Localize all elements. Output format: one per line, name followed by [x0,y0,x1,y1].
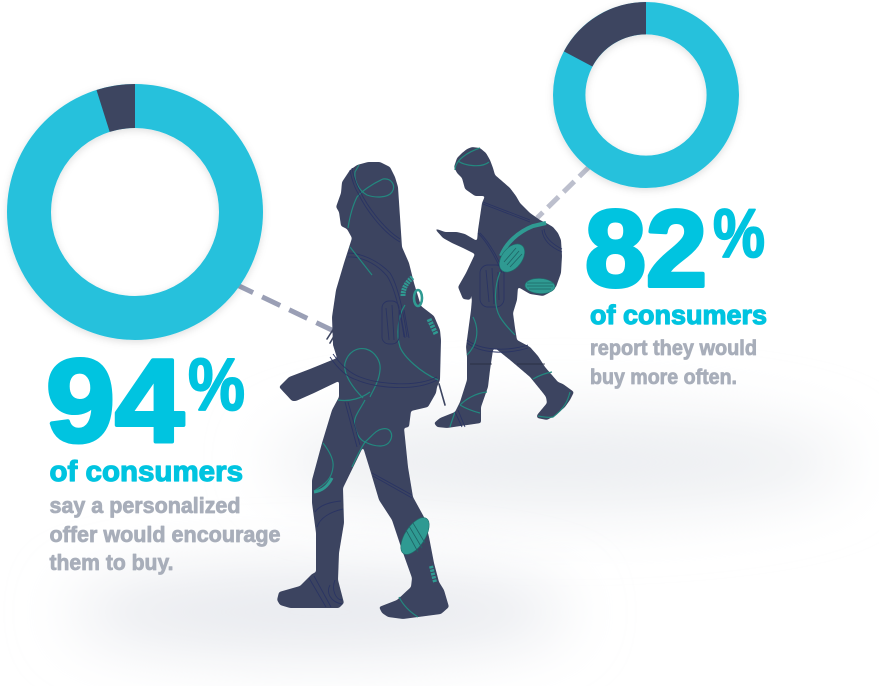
description: buy more often: buy more often. [590,366,737,389]
background: ground shadow below girl [70,572,570,652]
donut chart: 82 percent [564,2,723,172]
description: personalized offer [50,493,280,575]
subheading: of consumers: of consumers [590,300,767,330]
girl: headphones on backpack and leg [395,277,436,582]
stat block: 94 percent [46,336,280,575]
figure: boy walking with phone [434,147,574,428]
donut chart: 94 percent [29,84,241,318]
dashed connector: left donut to girl [235,284,336,332]
description: personalized offer: say a personalized [50,493,240,518]
description: personalized offer: them to buy. [50,550,174,575]
dashed connector: right donut to boy [537,166,590,218]
boy: headphones on backpack [494,223,555,294]
subheading: of consumers: of consumers [50,456,243,488]
description: buy more often: report they would [590,337,757,360]
description: buy more often [590,337,757,389]
stat block: 82 percent [585,188,767,389]
boy: cables and straps [450,148,570,427]
girl: cables and straps [309,165,438,617]
background: ground shadow behind boy [270,414,850,510]
percent sign: 82: % [713,195,765,272]
stat number: 82: 82 [585,188,707,310]
girl: loose hair and bag strap [327,325,445,405]
percent sign: 94: % [188,343,245,426]
description: personalized offer: offer would encourage [50,522,280,547]
figure: girl walking with backpack [277,162,449,619]
stat number: 94: 94 [46,336,184,468]
